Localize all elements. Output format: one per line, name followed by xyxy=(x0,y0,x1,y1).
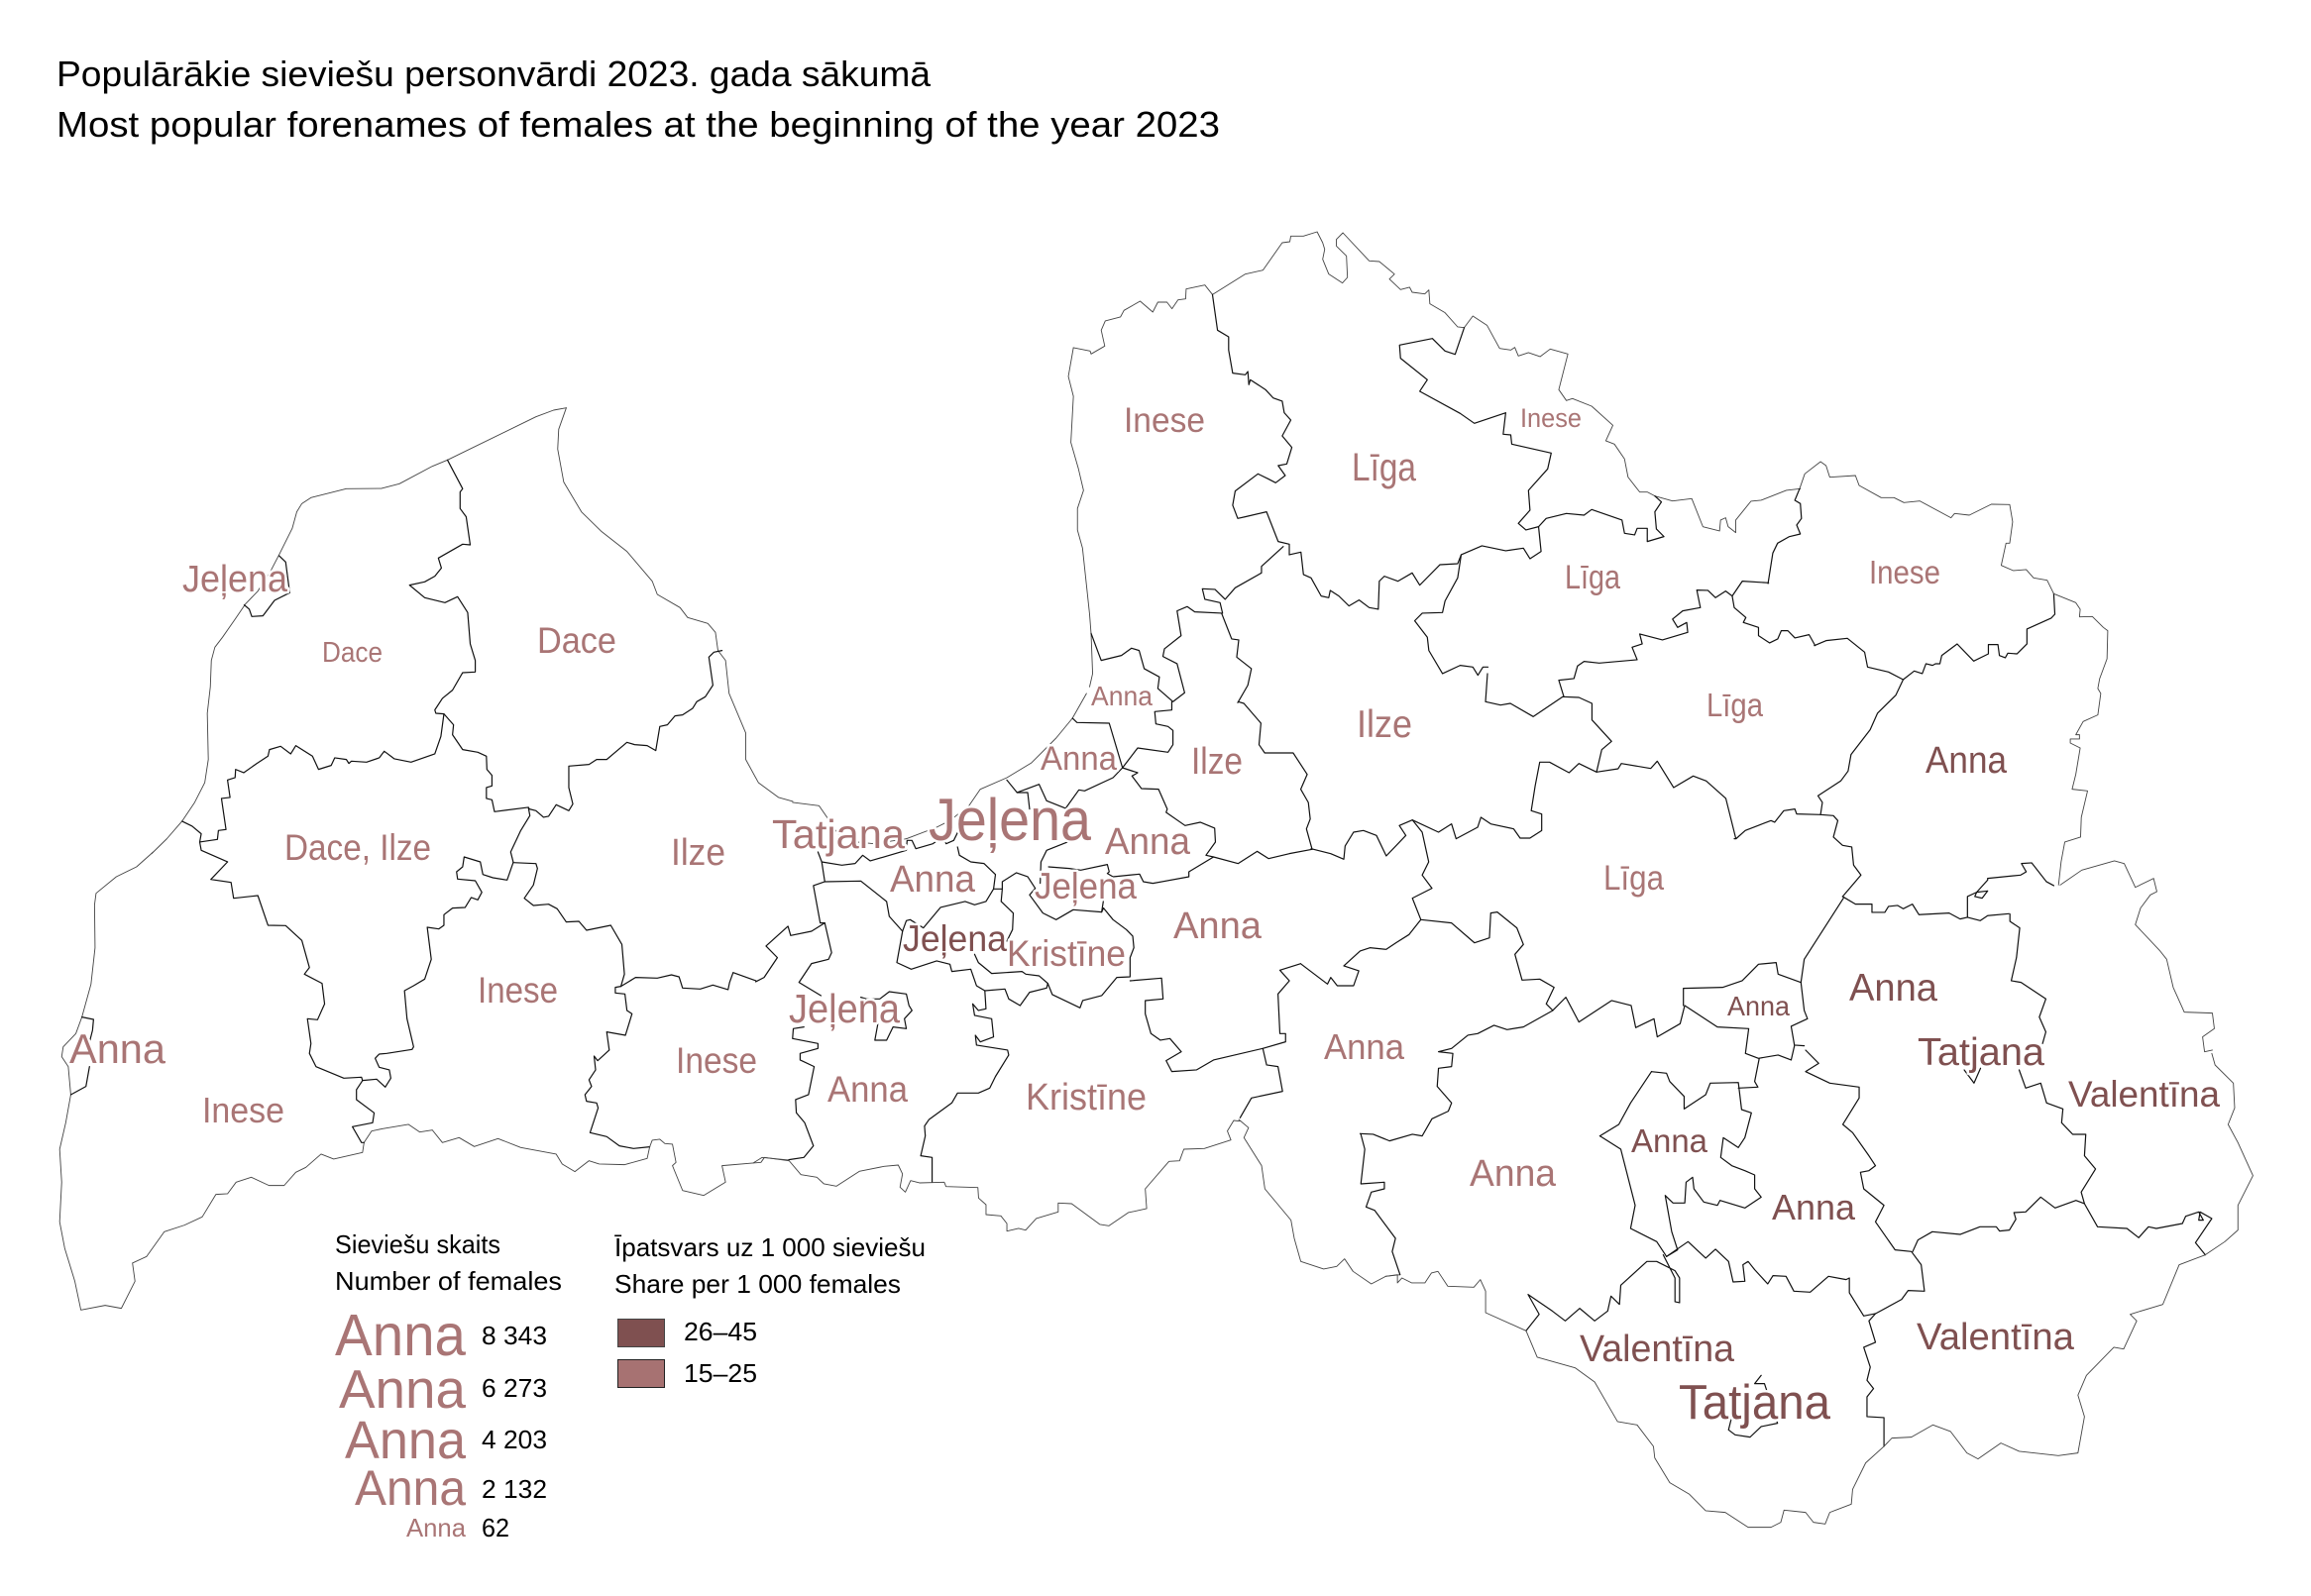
legend heading: share: Share per 1 000 females xyxy=(614,1269,901,1299)
boundaries: east xyxy=(1301,674,2214,1141)
label: Inese Valka: Inese xyxy=(1520,403,1582,433)
label: Anna Balvi dark: Anna xyxy=(1926,740,2008,782)
size sample: 2 132: 2 132 xyxy=(482,1474,547,1504)
boundaries: north Vidzeme xyxy=(1068,232,1816,702)
label: Līga Gulbene: Līga xyxy=(1706,687,1764,723)
label: Jeļena Jelgava: Jeļena xyxy=(789,986,900,1031)
title: Most popular forenames of females at the beginning of the year 2023 xyxy=(56,104,1220,145)
label: Jeļena Salaspils: Jeļena xyxy=(1035,866,1137,906)
swatch: 26–45: 26–45 xyxy=(684,1317,757,1346)
map: municipality boundaries of Latvia xyxy=(59,232,2253,1528)
boundaries: south border xyxy=(753,1120,1240,1231)
size sample: 62 xyxy=(406,1513,509,1543)
title: Populārākie sieviešu personvārdi 2023. gada sākumā xyxy=(56,53,932,94)
boundaries: central Riga area xyxy=(756,693,1312,1182)
swatch: 15–25 xyxy=(618,1358,757,1388)
label: Jeļena Riga: Jeļena xyxy=(929,787,1092,853)
label: Dace, Ilze: Dace, Ilze xyxy=(284,827,431,868)
label: Kristīne Bauska: Kristīne xyxy=(1026,1077,1147,1118)
boundaries: north-east xyxy=(1734,462,2108,920)
label: Anna Ogre: Anna xyxy=(1173,905,1263,947)
label: Ilze Sigulda: Ilze xyxy=(1191,741,1243,783)
label: Anna Rezekne region dark: Anna xyxy=(1849,967,1937,1010)
legend heading: number of females: Sieviešu skaits xyxy=(335,1229,500,1259)
swatch: 15–25: 15–25 xyxy=(684,1358,757,1388)
label: Līga Madona: Līga xyxy=(1603,859,1664,898)
legend heading: share xyxy=(614,1232,926,1299)
map labels: most popular names xyxy=(69,401,2220,1430)
size sample: 62: 62 xyxy=(482,1513,509,1543)
label: Anna Jelgava region: Anna xyxy=(827,1069,908,1110)
label: Tatjana Rezekne dark: Tatjana xyxy=(1918,1031,2044,1074)
size sample: 6 273 xyxy=(339,1358,547,1420)
label: Tatjana Jurmala: Tatjana xyxy=(772,811,905,857)
label: Anna Preili dark: Anna xyxy=(1772,1187,1856,1227)
label: Ilze Tukums: Ilze xyxy=(671,832,725,874)
legend: number of females xyxy=(335,1229,562,1543)
size sample: 4 203: Anna xyxy=(345,1411,467,1470)
legend heading: number of females: Number of females xyxy=(335,1266,562,1296)
label: Valentīna Kraslava dark: Valentīna xyxy=(1917,1317,2075,1358)
size sample: 2 132: Anna xyxy=(355,1460,466,1516)
label: Anna Liepaja: Anna xyxy=(69,1025,166,1072)
size sample: 62: Anna xyxy=(406,1513,467,1543)
label: Dace large: Dace xyxy=(537,620,616,661)
legend: share per 1 000 females xyxy=(614,1232,926,1388)
label: Anna Livani dark: Anna xyxy=(1631,1122,1708,1159)
label: Jeļena Ventspils: Jeļena xyxy=(182,559,288,600)
legend heading: number of females xyxy=(335,1229,562,1296)
swatch: 26–45 xyxy=(618,1317,757,1347)
label: Inese Limbazi: Inese xyxy=(1124,401,1205,440)
size sample: 4 203 xyxy=(345,1411,547,1470)
label: Inese Dobele: Inese xyxy=(676,1040,757,1081)
label: Anna Marupe: Anna xyxy=(890,859,976,901)
label: Valentīna Augsdaugava dark: Valentīna xyxy=(1580,1329,1735,1370)
size sample: 8 343 xyxy=(335,1303,547,1368)
label: Anna Varaklani small dark: Anna xyxy=(1727,991,1790,1021)
label: Anna Aizkraukle: Anna xyxy=(1324,1026,1405,1067)
boundaries: south-west xyxy=(59,852,789,1310)
label: Valentīna Ludza dark: Valentīna xyxy=(2068,1074,2220,1115)
boundaries: south-east xyxy=(1239,1050,2253,1528)
label: Jeļena Olaine dark: Jeļena xyxy=(903,918,1007,959)
label: Inese Dienvidkurzeme: Inese xyxy=(202,1090,284,1130)
boundaries: north-west coast xyxy=(152,408,793,862)
size sample: 8 343: Anna xyxy=(335,1303,466,1368)
label: Dace small: Dace xyxy=(322,637,383,669)
label: Anna Jekabpils: Anna xyxy=(1470,1153,1557,1195)
size sample: 4 203: 4 203 xyxy=(482,1425,547,1454)
size sample: 8 343: 8 343 xyxy=(482,1321,547,1350)
size sample: 6 273: 6 273 xyxy=(482,1373,547,1403)
label: Ilze Cesis: Ilze xyxy=(1357,703,1412,746)
label: Līga Smiltene: Līga xyxy=(1565,559,1620,596)
size sample: 2 132 xyxy=(355,1460,547,1516)
label: Inese Saldus: Inese xyxy=(478,970,558,1011)
title xyxy=(56,53,1220,145)
legend heading: share: Īpatsvars uz 1 000 sieviešu xyxy=(614,1232,926,1262)
label: Anna Saulkrasti: Anna xyxy=(1041,740,1117,778)
label: Anna Saulkrasti small: Anna xyxy=(1091,681,1153,711)
size sample: 6 273: Anna xyxy=(339,1358,466,1420)
label: Līga Valmiera: Līga xyxy=(1352,446,1417,489)
label: Tatjana Daugavpils dark: Tatjana xyxy=(1679,1376,1831,1430)
label: Inese Aluksne: Inese xyxy=(1869,554,1940,590)
label: Kristīne Kekava: Kristīne xyxy=(1007,933,1126,974)
label: Anna Ropazi: Anna xyxy=(1105,821,1191,863)
